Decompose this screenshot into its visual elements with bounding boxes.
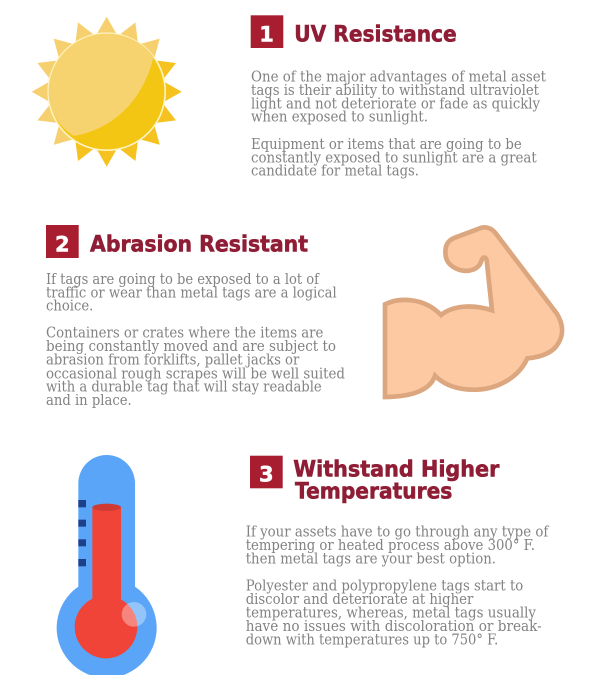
text block: temperature paragraph one: tempering or heated process above 300° F.	[246, 536, 535, 554]
text block: UV paragraph one: when exposed to sunlight.	[251, 108, 428, 126]
icon: thermometer	[57, 455, 157, 675]
text block: temperature paragraph two: temperatures, whereas, metal tags usually	[246, 604, 536, 622]
heading: Withstand Higher Temperatures: Temperatures	[295, 478, 452, 504]
text block: UV paragraph one: One of the major advantages of metal asset	[251, 68, 546, 86]
heading: Abrasion Resistant: Abrasion Resistant	[90, 232, 308, 258]
text block: temperature paragraph two: have no issues with discoloration or break-	[246, 617, 542, 635]
text block: abrasion paragraph one: traffic or wear than metal tags are a logical	[46, 283, 337, 301]
text block: abrasion paragraph one	[46, 270, 337, 315]
number badge 1: 1	[259, 22, 274, 46]
number badge 3	[250, 456, 283, 488]
text block: abrasion paragraph two: being constantly moved and are subject to	[46, 337, 336, 355]
text block: temperature paragraph one: If your assets have to go through any type of	[246, 523, 550, 541]
text block: abrasion paragraph two: with a durable tag that will stay readable	[46, 378, 322, 396]
heading: UV Resistance: UV Resistance	[294, 22, 457, 48]
text block: temperature paragraph two: down with temperatures up to 750° F.	[246, 630, 498, 648]
text block: UV paragraph two: candidate for metal tags.	[251, 162, 419, 180]
text block: UV paragraph one	[251, 68, 546, 126]
text block: temperature paragraph one: then metal tags are your best option.	[246, 549, 496, 567]
number badge 2: 2	[55, 232, 70, 256]
heading: Withstand Higher Temperatures	[293, 457, 500, 504]
text block: abrasion paragraph two: occasional rough scrapes will be well suited	[46, 364, 345, 382]
text block: abrasion paragraph two	[46, 323, 345, 409]
text block: temperature paragraph one	[246, 523, 550, 567]
text block: temperature paragraph two	[246, 577, 542, 648]
text block: abrasion paragraph two: Containers or crates where the items are	[46, 323, 323, 341]
text block: temperature paragraph two: discolor and deteriorate at higher	[246, 590, 474, 608]
text block: abrasion paragraph two: and in place.	[46, 391, 132, 409]
text block: abrasion paragraph one: choice.	[46, 297, 93, 315]
icon: flexed arm	[385, 227, 562, 397]
icon: sun	[32, 17, 182, 167]
number badge 1	[251, 15, 283, 48]
number badge 3: 3	[259, 462, 274, 486]
text block: UV paragraph one: light and not deteriorate or fade as quickly	[251, 94, 540, 112]
heading: Withstand Higher Temperatures: Withstand Higher	[293, 457, 500, 483]
panel: abrasion resistant	[46, 225, 562, 409]
text block: temperature paragraph two: Polyester and polypropylene tags start to	[246, 577, 523, 595]
panel: UV resistance	[32, 15, 546, 180]
text block: UV paragraph one: tags is their ability to withstand ultraviolet	[251, 81, 539, 99]
text block: UV paragraph two	[251, 135, 537, 180]
panel: withstand higher temperatures	[57, 455, 550, 675]
number badge 2	[46, 225, 79, 258]
text block: UV paragraph two: constantly exposed to sunlight are a great	[251, 149, 537, 167]
text block: abrasion paragraph one: If tags are going to be exposed to a lot of	[46, 270, 320, 288]
text block: UV paragraph two: Equipment or items that are going to be	[251, 135, 522, 153]
text block: abrasion paragraph two: abrasion from forklifts, pallet jacks or	[46, 350, 300, 368]
